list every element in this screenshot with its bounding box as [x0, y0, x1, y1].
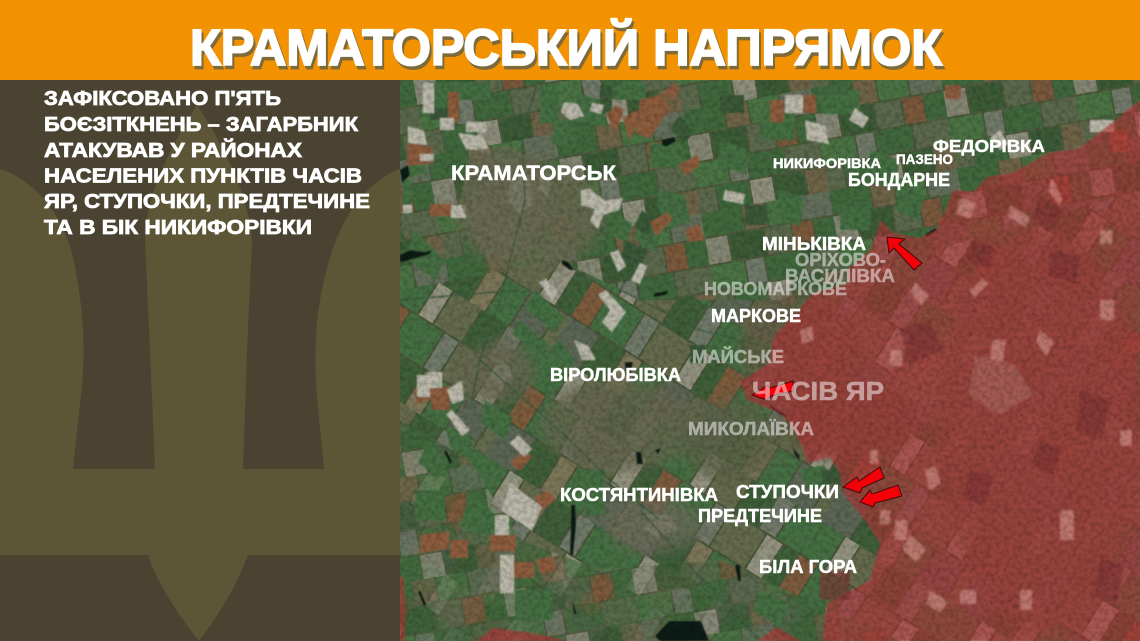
label: Markove: МАРКОВЕ — [711, 306, 801, 326]
title: КРАМАТОРСЬКИЙ НАПРЯМОК — [190, 18, 943, 76]
label: Bila Hora: БІЛА ГОРА — [759, 557, 857, 577]
label: Bondarne: БОНДАРНЕ — [848, 170, 950, 190]
label: Virolyubivka: ВІРОЛЮБІВКА — [550, 365, 681, 385]
panel: left text panel — [0, 80, 400, 641]
label: Minkivka: МІНЬКІВКА — [762, 234, 866, 254]
roads and rivers — [400, 82, 760, 640]
water bodies — [400, 137, 937, 641]
icon: trident watermark — [0, 105, 400, 641]
arrow: Stupochky attack — [843, 467, 884, 493]
label: Fedorivka: ФЕДОРІВКА — [933, 136, 1045, 156]
label: Orikhovo-Vasylivka — [785, 250, 895, 286]
enemy-held red overlay — [400, 100, 1140, 641]
arrow: Chasiv Yar attack — [752, 381, 793, 400]
label: Kramatorsk: КРАМАТОРСЬК — [451, 162, 616, 185]
label: Orikhovo-Vasylivka: ОРІХОВО- — [795, 250, 886, 270]
label: Mykolaivka: МИКОЛАЇВКА — [688, 419, 814, 439]
arrow: Predtechyne attack — [860, 485, 902, 507]
label: Kostiantynivka: КОСТЯНТИНІВКА — [560, 485, 718, 505]
map labels — [451, 136, 1045, 577]
muted satellite tone — [400, 80, 1140, 641]
arrow: Minkivka attack — [887, 237, 922, 270]
farm fields — [400, 80, 1140, 641]
label: Stupochky: СТУПОЧКИ — [736, 482, 839, 502]
label: Novomarkove: НОВОМАРКОВЕ — [704, 279, 847, 299]
label: Orikhovo-Vasylivka: ВАСИЛІВКА — [785, 266, 895, 286]
pink fields in red zone — [800, 178, 1132, 612]
label: Chasiv Yar: ЧАСІВ ЯР — [752, 376, 884, 406]
terrain blotches — [455, 160, 1140, 630]
text block: situation summary: ЗАФІКСОВАНО П'ЯТЬ — [44, 87, 281, 110]
panel: satellite map — [400, 80, 1140, 641]
text block: situation summary: АТАКУВАВ У РАЙОНАХ — [44, 138, 302, 162]
label: Predtechyne: ПРЕДТЕЧИНЕ — [698, 506, 822, 526]
label: Pazeno: ПАЗЕНО — [896, 151, 953, 167]
header band — [0, 0, 1140, 80]
map texture — [400, 80, 1140, 641]
text block: situation summary: ЯР, СТУПОЧКИ, ПРЕДТЕЧИНЕ — [44, 190, 370, 213]
text block: situation summary: ТА В БІК НИКИФОРІВКИ — [44, 216, 312, 239]
text block: situation summary: НАСЕЛЕНИХ ПУНКТІВ ЧАСІВ — [44, 164, 362, 188]
text block: situation summary — [44, 87, 370, 239]
label: Maiske: МАЙСЬКЕ — [692, 346, 784, 367]
text block: situation summary: БОЄЗІТКНЕНЬ – ЗАГАРБНИК — [44, 113, 359, 136]
label: Nykyforivka: НИКИФОРІВКА — [773, 155, 881, 171]
title: КРАМАТОРСЬКИЙ НАПРЯМОК — [192, 22, 945, 80]
